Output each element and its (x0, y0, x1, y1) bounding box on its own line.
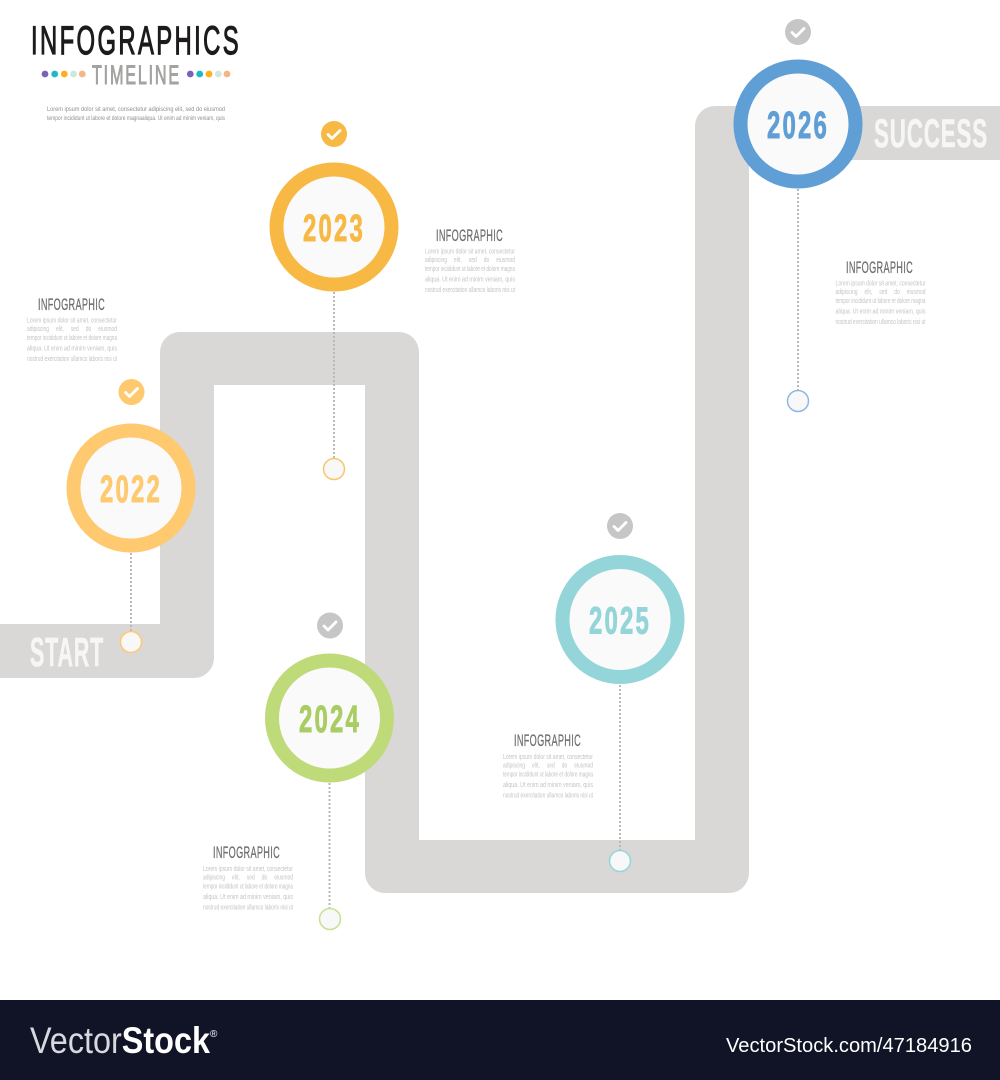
title: infographics: INFOGRAPHICS (31, 19, 241, 63)
text block 2023: adipiscing elit, sed do eiusmod (425, 257, 515, 264)
text block 2024: aliqua. Ut enim ad minim veniam, quis (203, 894, 293, 901)
text block 2022: adipiscing elit, sed do eiusmod (27, 326, 117, 333)
text block 2023: INFOGRAPHIC (436, 226, 503, 245)
end marker 2022 (120, 632, 142, 652)
title description: tempor incididunt ut labore et dolore magnaaliqua. Ut enim ad minim veniam, quis (47, 115, 226, 122)
year text 2026: 2026 (767, 105, 829, 147)
end marker 2024 (320, 908, 340, 930)
text block 2025 (503, 731, 593, 800)
text block 2025: nostrud exercitation ullamco laboris nisi ut (503, 792, 593, 800)
check badge 2025 (607, 513, 633, 539)
registered mark: ® (210, 1029, 218, 1040)
text block 2022: Lorem ipsum dolor sit amet, consectetur (27, 318, 117, 324)
milestone 2022 (74, 379, 188, 652)
end marker 2026 (788, 390, 808, 412)
year ring 2026 (740, 66, 856, 182)
text block 2026: aliqua. Ut enim ad minim veniam, quis (836, 308, 926, 316)
road path from start to success (0, 106, 1000, 893)
title description (47, 106, 226, 122)
text block 2025: adipiscing elit, sed do eiusmod (503, 762, 593, 770)
text block 2025: Lorem ipsum dolor sit amet, consectetur (503, 754, 593, 761)
text block 2022 (27, 295, 117, 363)
text block 2023: aliqua. Ut enim ad minim veniam, quis (425, 276, 515, 284)
text block 2026: adipiscing elit, sed do eiusmod (836, 289, 926, 296)
milestone 2026 (740, 19, 856, 412)
year text 2022: 2022 (100, 469, 162, 511)
label: start: START (30, 629, 104, 675)
text block 2026: Lorem ipsum dolor sit amet, consectetur (836, 280, 926, 288)
text block 2024: tempor incididunt ut labore et dolore magna (203, 884, 293, 890)
year text 2024: 2024 (299, 699, 361, 741)
footer logo: VectorStock (30, 1020, 210, 1061)
text block 2024: Lorem ipsum dolor sit amet, consectetur (203, 866, 293, 873)
milestone 2024 (272, 612, 387, 930)
text block 2022: tempor incididunt ut labore et dolore magna (27, 335, 117, 342)
text block 2023: tempor incididunt ut labore et dolore magna (425, 266, 515, 273)
text block 2026: tempor incididunt ut labore et dolore magna (836, 298, 926, 305)
year ring 2024 (272, 660, 387, 776)
decorative dots right (187, 71, 230, 77)
text block 2024: adipiscing elit, sed do eiusmod (203, 874, 293, 882)
end marker 2025 (610, 850, 630, 872)
text block 2022: aliqua. Ut enim ad minim veniam, quis (27, 346, 117, 352)
text block 2022: INFOGRAPHIC (38, 295, 105, 314)
milestone 2023 (276, 121, 392, 480)
text block 2025: tempor incididunt ut labore et dolore magna (503, 772, 593, 778)
year text 2025: 2025 (589, 600, 651, 642)
text block 2024: nostrud exercitation ullamco laboris nisi ut (203, 904, 293, 912)
year ring 2023 (276, 170, 392, 284)
year text 2023: 2023 (303, 208, 365, 250)
title description: Lorem ipsum dolor sit amet, consectetur adipiscing elit, sed do eiusmod (47, 106, 225, 113)
decorative dots left (42, 71, 86, 77)
check badge 2026 (785, 19, 811, 45)
year ring 2025 (562, 562, 678, 677)
text block 2024 (203, 843, 293, 912)
year ring 2022 (74, 430, 188, 546)
check badge 2024 (317, 612, 343, 638)
text block 2023: nostrud exercitation ullamco laboris nisi ut (425, 287, 515, 294)
text block 2026 (836, 258, 926, 326)
end marker 2023 (324, 458, 344, 480)
footer bar (0, 1000, 1000, 1080)
text block 2022: nostrud exercitation ullamco laboris nisi ut (27, 356, 117, 363)
text block 2026: INFOGRAPHIC (846, 258, 913, 277)
milestone 2025 (562, 513, 678, 872)
footer id: VectorStock.com/47184916 (726, 1035, 972, 1057)
text block 2026: nostrud exercitation ullamco laboris nisi ut (836, 319, 926, 326)
check badge 2022 (118, 379, 144, 405)
check badge 2023 (321, 121, 347, 147)
text block 2025: INFOGRAPHIC (514, 731, 581, 750)
text block 2025: aliqua. Ut enim ad minim veniam, quis (503, 782, 593, 789)
text block 2024: INFOGRAPHIC (213, 843, 280, 862)
text block 2023: Lorem ipsum dolor sit amet, consectetur (425, 248, 515, 256)
title block (31, 19, 241, 122)
subtitle: timeline: TIMELINE (92, 60, 181, 90)
text block 2023 (425, 226, 515, 294)
